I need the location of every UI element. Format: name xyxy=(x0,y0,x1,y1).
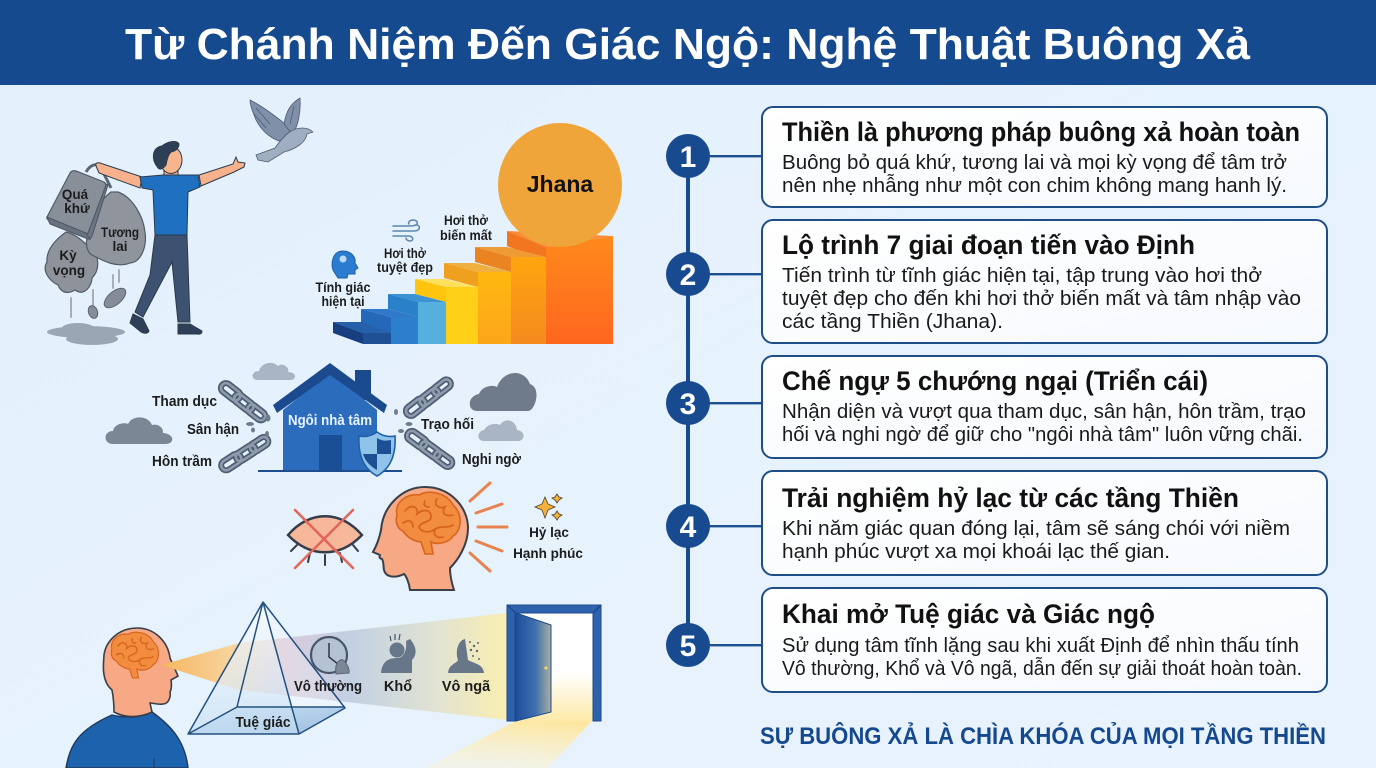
rays xyxy=(470,483,507,571)
label: Vô thường: Vô thường xyxy=(294,679,362,695)
clouds xyxy=(106,363,536,444)
label: Hơi thở tuyệt đẹp xyxy=(377,246,433,275)
label: Hôn trầm: Hôn trầm xyxy=(152,454,212,470)
timeline spine xyxy=(686,156,690,645)
viewer xyxy=(66,628,188,768)
label: Tính giác hiện tại: Tính giác xyxy=(316,280,371,295)
icon: clock xyxy=(311,637,349,674)
icon: wind xyxy=(393,220,419,241)
bag: Kỳ vọng xyxy=(45,232,98,292)
number badge xyxy=(666,504,710,548)
bag: Tương lai: Tương xyxy=(101,225,139,240)
bag: Tương lai xyxy=(86,192,145,265)
card: Thiền là phương pháp buông xả hoàn toàn xyxy=(782,117,1300,147)
number badge xyxy=(666,623,710,667)
card: Sử dụng tâm tĩnh lặng sau khi xuất Định để nhìn thấu tính xyxy=(782,635,1299,657)
card: Chế ngự 5 chướng ngại (Triển cái) xyxy=(782,366,1208,396)
label: Hơi thở biến mất: Hơi thở xyxy=(444,213,488,228)
number badge: 1 xyxy=(680,141,696,174)
label: Hỷ lạc Hạnh phúc: Hạnh phúc xyxy=(513,546,583,561)
label: Hơi thở biến mất xyxy=(440,213,492,243)
drips and rocks xyxy=(71,270,129,320)
card: Khi năm giác quan đóng lại, tâm sẽ sáng chói với niềm xyxy=(782,518,1290,540)
connector xyxy=(708,644,762,646)
title: Từ Chánh Niệm Đến Giác Ngộ: Nghệ Thuật Buông Xả xyxy=(125,20,1251,69)
connector xyxy=(708,525,762,527)
icon: shield xyxy=(359,432,395,476)
pyramid xyxy=(188,602,345,734)
label: Nghi ngờ: Nghi ngờ xyxy=(462,452,522,468)
icon: head xyxy=(332,251,358,278)
number badge: 4 xyxy=(680,511,697,544)
footer tagline: SỰ BUÔNG XẢ LÀ CHÌA KHÓA CỦA MỌI TẦNG THIỀN xyxy=(760,721,1326,750)
man xyxy=(96,142,245,334)
beam xyxy=(161,613,507,720)
card: hối và nghi ngờ để giữ cho "ngôi nhà tâm" luôn vững chãi. xyxy=(782,424,1303,446)
door xyxy=(507,605,601,721)
label: Sân hận: Sân hận xyxy=(187,422,239,438)
number badge xyxy=(666,134,710,178)
light on floor xyxy=(425,721,592,768)
number badge xyxy=(666,252,710,296)
card xyxy=(762,107,1327,207)
card: Tiến trình từ tĩnh giác hiện tại, tập trung vào hơi thở xyxy=(782,265,1262,287)
label: Tính giác hiện tại xyxy=(316,280,371,309)
label: Hỷ lạc Hạnh phúc: Hỷ lạc xyxy=(529,525,569,540)
bag: Tương lai: lai xyxy=(112,239,128,254)
number badge: 5 xyxy=(680,630,696,663)
step 1 xyxy=(666,107,1327,207)
card: tuyệt đẹp cho đến khi hơi thở biến mất và tâm nhập vào xyxy=(782,288,1301,310)
pyramid: Tuệ giác xyxy=(236,715,290,731)
label: Trạo hối: Trạo hối xyxy=(421,417,474,433)
bag: Kỳ vọng: vọng xyxy=(53,263,85,278)
illustration: insight through prism to door xyxy=(66,602,601,768)
icon: crossed eye xyxy=(288,510,362,568)
card: Buông bỏ quá khứ, tương lai và mọi kỳ vọng để tâm trở xyxy=(782,152,1287,174)
card: Trải nghiệm hỷ lạc từ các tầng Thiền xyxy=(782,483,1239,513)
house: Ngôi nhà tâm xyxy=(288,413,372,429)
illustration: house of mind with hindrances xyxy=(106,363,536,476)
card: Vô thường, Khổ và Vô ngã, dẫn đến sự giải thoát hoàn toàn. xyxy=(782,657,1302,680)
sun: Jhana xyxy=(498,123,622,247)
card: hạnh phúc vượt xa mọi khoái lạc thế gian. xyxy=(782,541,1170,563)
dove xyxy=(250,98,313,162)
icon: sparkles xyxy=(535,494,562,520)
label: Hơi thở biến mất: biến mất xyxy=(440,228,492,243)
icon: suffering figure xyxy=(381,634,416,673)
bag: Quá khứ: khứ xyxy=(64,201,90,216)
label: Hơi thở tuyệt đẹp: Hơi thở xyxy=(384,246,426,261)
card: Khai mở Tuệ giác và Giác ngộ xyxy=(782,599,1155,629)
bag: Kỳ vọng: Kỳ xyxy=(59,248,77,263)
number badge: 3 xyxy=(680,388,696,421)
connector xyxy=(708,402,762,404)
head with brain xyxy=(373,487,468,590)
label: Tham dục: Tham dục xyxy=(152,394,217,410)
card xyxy=(762,220,1327,343)
card: các tầng Thiền (Jhana). xyxy=(782,311,1003,333)
chains xyxy=(219,377,455,472)
card: Nhận diện và vượt qua tham dục, sân hận, hôn trầm, trạo xyxy=(782,401,1306,423)
puddle xyxy=(47,323,125,345)
card: nên nhẹ nhẫng như một con chim không mang hanh lý. xyxy=(782,174,1287,197)
card xyxy=(762,356,1327,458)
connector xyxy=(708,155,762,157)
house xyxy=(258,363,402,472)
label: Hỷ lạc Hạnh phúc xyxy=(513,525,583,561)
card xyxy=(762,588,1327,692)
icon: dissolving self xyxy=(448,639,484,673)
label: Vô ngã: Vô ngã xyxy=(442,679,491,695)
sun: Jhana: Jhana xyxy=(527,171,593,197)
step 5 xyxy=(666,588,1327,692)
card xyxy=(762,471,1327,575)
illustration: senses closed and bliss xyxy=(288,483,583,590)
step 2 xyxy=(666,220,1327,343)
step 3 xyxy=(666,356,1327,458)
illustration: staircase to Jhana xyxy=(316,123,622,344)
number badge: 2 xyxy=(680,259,696,292)
stairs xyxy=(333,231,613,344)
label: Khổ: Khổ xyxy=(384,679,412,695)
bag: Quá khứ xyxy=(47,165,111,239)
label: Hơi thở tuyệt đẹp: tuyệt đẹp xyxy=(377,260,433,275)
illustration: letting go man with bags and dove xyxy=(45,98,313,345)
bag: Quá khứ: Quá xyxy=(62,187,89,202)
number badge xyxy=(666,381,710,425)
connector xyxy=(708,273,762,275)
step 4 xyxy=(666,471,1327,575)
header banner xyxy=(0,0,1376,85)
card: Lộ trình 7 giai đoạn tiến vào Định xyxy=(782,230,1195,260)
label: Tính giác hiện tại: hiện tại xyxy=(322,294,364,309)
